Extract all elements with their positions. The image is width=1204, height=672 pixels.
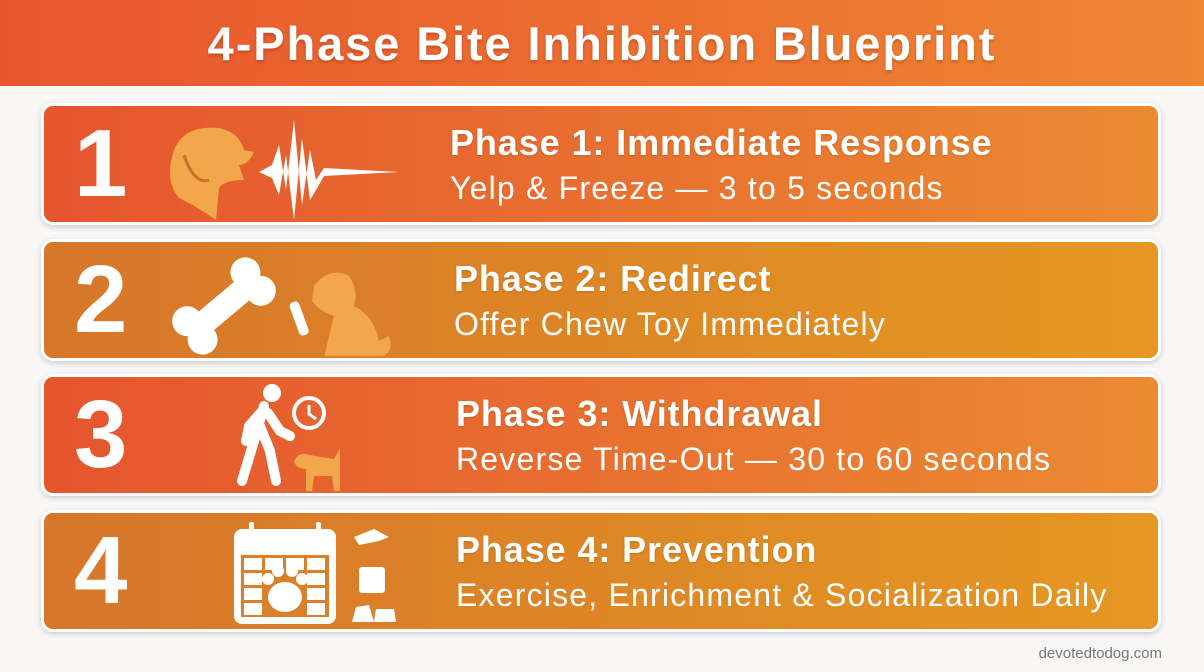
panel: phase 4 xyxy=(41,510,1161,632)
subtitle: Yelp & Freeze — 3 to 5 seconds xyxy=(450,170,944,206)
footer credit: devotedtodog.com xyxy=(1039,645,1162,662)
number 2: 2 xyxy=(74,246,127,353)
icon: dog yelping with sound wave xyxy=(170,120,398,220)
panel: phase 1 xyxy=(41,103,1161,225)
title xyxy=(0,0,1204,86)
panel: phase 2 xyxy=(41,239,1161,361)
heading: Phase 2: Redirect xyxy=(454,258,771,299)
subtitle: Exercise, Enrichment & Socialization Daily xyxy=(456,577,1108,613)
heading: Phase 1: Immediate Response xyxy=(450,122,993,163)
heading: Phase 3: Withdrawal xyxy=(456,393,823,434)
heading: Phase 4: Prevention xyxy=(456,529,817,570)
number 3: 3 xyxy=(74,381,127,488)
number 1: 1 xyxy=(74,110,127,217)
title: 4-Phase Bite Inhibition Blueprint xyxy=(208,17,996,70)
subtitle: Reverse Time-Out — 30 to 60 seconds xyxy=(456,441,1051,477)
icon: calendar with paw, dogs and puzzle xyxy=(234,522,396,624)
panel: phase 3 xyxy=(41,374,1161,496)
icon: person walking away, clock, puppy xyxy=(237,384,340,491)
number 4: 4 xyxy=(74,517,127,624)
subtitle: Offer Chew Toy Immediately xyxy=(454,306,886,342)
icon: chew toy and puppy xyxy=(172,257,391,356)
